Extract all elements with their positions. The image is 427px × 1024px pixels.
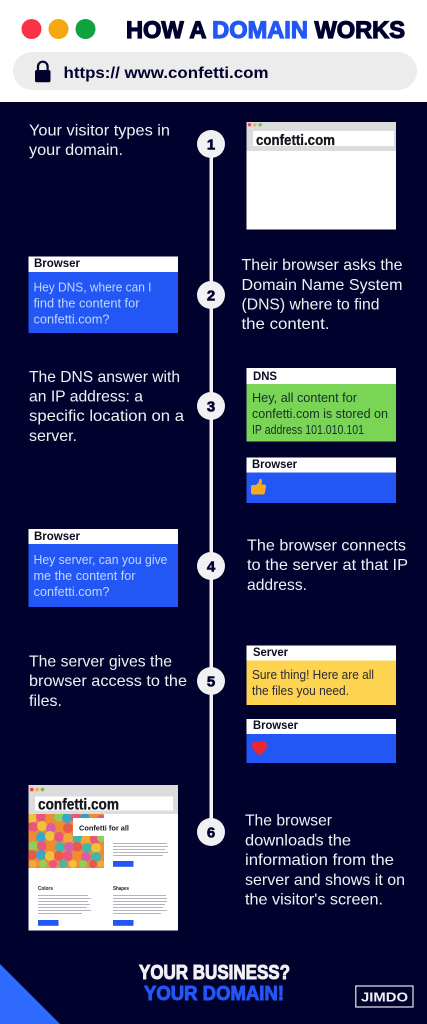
step 1 text <box>29 122 170 159</box>
step 5 server message: Sure thing! Here are all <box>252 667 374 682</box>
step 3 text: specific location on a <box>29 408 184 425</box>
step 4 browser message: confetti.com? <box>34 584 110 599</box>
step 3 DNS message: IP address 101.010.101 <box>252 422 364 437</box>
Jimdo logo: JIMDO <box>361 990 408 1004</box>
step 2 text: (DNS) where to find <box>242 296 380 314</box>
icon: thumbs up <box>251 479 266 494</box>
step 6 website mockup: Colors <box>38 886 53 892</box>
step 6 website mockup <box>27 785 178 930</box>
step 3 text <box>29 369 184 445</box>
step 1 text: Your visitor types in <box>29 122 170 140</box>
step 5 server message: the files you need. <box>252 683 349 698</box>
step 4 text: to the server at that IP <box>247 557 408 574</box>
step 2 browser message: find the content for <box>34 296 140 310</box>
step 2 browser message <box>28 256 178 333</box>
footer slogan: YOUR DOMAIN! <box>144 983 284 1005</box>
step 4 browser message: me the content for <box>34 568 136 583</box>
step 3 DNS message: DNS <box>253 369 277 383</box>
confetti photo <box>27 812 105 868</box>
step 5 text: files. <box>29 693 62 710</box>
step 4 text: The browser connects <box>247 538 406 554</box>
step 6 website mockup: confetti.com <box>38 796 119 814</box>
footer slogan: YOUR BUSINESS? <box>139 962 290 984</box>
step 6 text: The browser <box>245 812 333 830</box>
window control dots <box>22 19 96 39</box>
Jimdo logo <box>356 986 413 1007</box>
step 1 number <box>197 130 225 158</box>
step 3 browser reply: Browser <box>252 457 297 471</box>
step 3 text: The DNS answer with <box>29 369 180 386</box>
icon: lock <box>35 62 50 82</box>
step 5 server message <box>246 645 396 705</box>
step 3 text: server. <box>29 428 77 445</box>
step 3 browser reply <box>246 457 396 503</box>
step 1 text: your domain. <box>29 142 123 159</box>
step 1 browser window <box>246 122 396 230</box>
step 6 text: the visitor's screen. <box>245 892 383 908</box>
step 5 number: 5 <box>207 674 215 690</box>
address bar <box>13 52 417 90</box>
corner triangle <box>0 964 60 1024</box>
step 6 website mockup: Confetti for all <box>79 824 129 832</box>
step 5 browser reply <box>246 718 396 763</box>
step 4 text <box>247 538 408 594</box>
step 5 text <box>29 654 187 710</box>
icon: heart <box>252 741 267 756</box>
step 3 DNS message: Hey, all content for <box>252 390 358 405</box>
step 2 browser message: Browser <box>34 256 80 270</box>
step 5 text: The server gives the <box>29 654 172 670</box>
step 5 number <box>197 667 225 695</box>
step 2 browser message: confetti.com? <box>34 312 110 326</box>
step 5 text: browser access to the <box>29 673 187 690</box>
step 4 number: 4 <box>207 558 216 576</box>
step 2 text: Domain Name System <box>242 277 402 294</box>
title: HOW A DOMAIN WORKS <box>126 17 405 44</box>
step 6 number: 6 <box>207 824 215 842</box>
step 3 number: 3 <box>207 398 215 416</box>
url text: https:// www.confetti.com <box>64 65 268 82</box>
step 2 number: 2 <box>207 288 215 304</box>
step 3 DNS message <box>246 368 396 442</box>
step 6 number <box>197 818 225 846</box>
timeline line <box>210 144 213 832</box>
step 1 number: 1 <box>207 136 215 154</box>
step 2 text: the content. <box>242 316 330 333</box>
step 3 DNS message: confetti.com is stored on <box>252 406 388 421</box>
step 2 text <box>242 257 403 333</box>
step 4 browser message: Hey server, can you give <box>34 552 168 567</box>
step 5 browser reply: Browser <box>253 718 298 732</box>
step 2 text: Their browser asks the <box>242 257 403 274</box>
step 6 website mockup: Shapes <box>113 886 129 892</box>
step 6 text: server and shows it on <box>245 872 405 889</box>
step 4 browser message: Browser <box>34 529 80 543</box>
step 1 browser window: confetti.com <box>256 133 335 149</box>
step 3 text: an IP address: a <box>29 388 143 406</box>
step 6 text: information from the <box>245 852 394 869</box>
step 4 browser message <box>28 529 178 607</box>
step 4 text: address. <box>247 577 307 594</box>
step 2 number <box>197 281 225 309</box>
step 5 server message: Server <box>253 645 288 659</box>
step 3 number <box>197 392 225 420</box>
step 6 text <box>245 812 405 908</box>
step 4 number <box>197 552 225 580</box>
footer slogan <box>139 962 290 1005</box>
step 2 browser message: Hey DNS, where can I <box>34 280 152 294</box>
step 6 text: downloads the <box>245 832 351 850</box>
